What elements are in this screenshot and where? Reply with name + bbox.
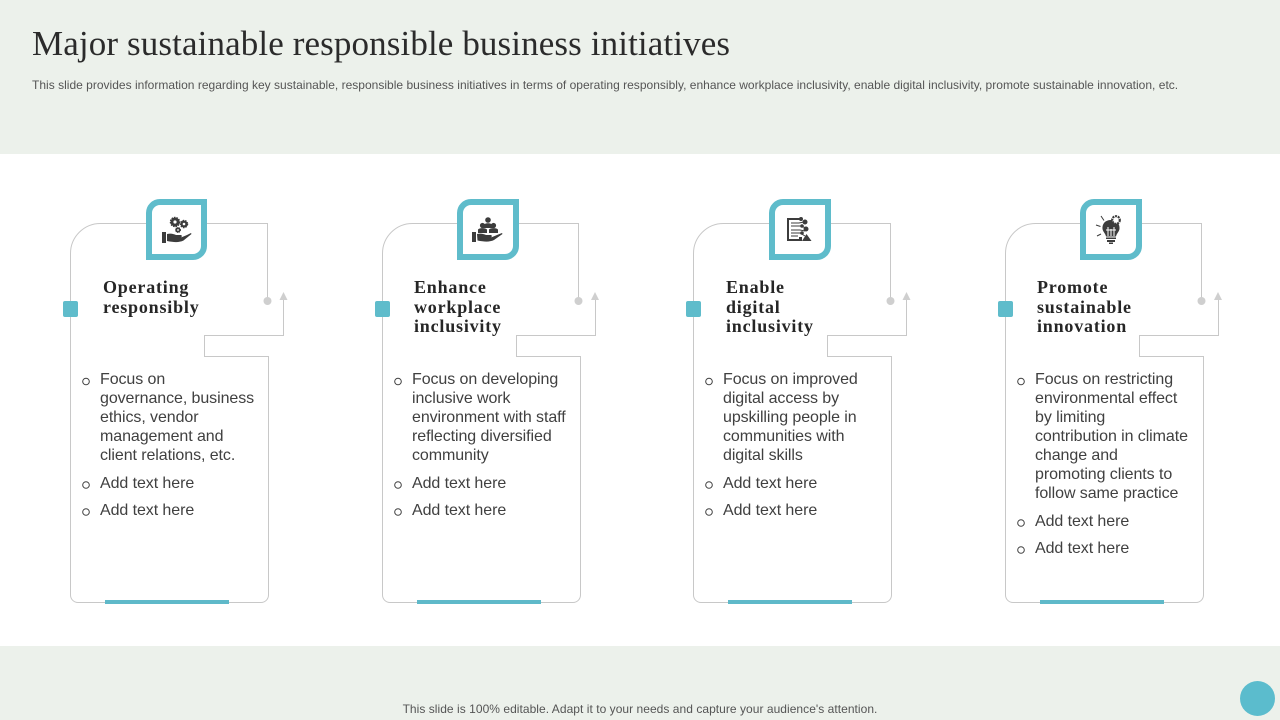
heading bbox=[103, 277, 200, 317]
bullet list bbox=[705, 371, 858, 519]
bullet list: Add text here bbox=[1035, 540, 1129, 557]
heading: Promote bbox=[1037, 277, 1108, 297]
bullet list: Add text here bbox=[723, 502, 817, 519]
subtitle: This slide provides information regarding key sustainable, responsible business initiatives in terms of operating responsibly, enhance workplace inclusivity, enable digital inclusivity, promote sustainable innovation, etc. bbox=[32, 78, 1178, 92]
heading: Enable bbox=[726, 277, 785, 297]
heading: Enhance bbox=[414, 277, 487, 297]
bullet list: Focus on developing bbox=[412, 371, 558, 388]
bullet list: change and bbox=[1035, 447, 1118, 464]
panel: enable digital inclusivity bbox=[686, 199, 910, 604]
bullet list: Add text here bbox=[100, 502, 194, 519]
bullet list: Add text here bbox=[412, 475, 506, 492]
bullet list: ethics, vendor bbox=[100, 409, 198, 426]
bullet list: digital skills bbox=[723, 447, 803, 464]
bullet list: client relations, etc. bbox=[100, 447, 235, 464]
icon: hand with gears bbox=[146, 199, 207, 260]
bullet list: community bbox=[412, 447, 489, 464]
bullet list: Focus on restricting bbox=[1035, 371, 1173, 388]
heading: responsibly bbox=[103, 296, 200, 316]
bullet list: follow same practice bbox=[1035, 485, 1178, 502]
bullet list: Focus on bbox=[100, 371, 165, 388]
heading: inclusivity bbox=[726, 316, 814, 336]
title: Major sustainable responsible business initiatives bbox=[32, 24, 730, 63]
bullet list bbox=[82, 371, 254, 519]
heading bbox=[1037, 277, 1132, 336]
icon: hand holding people bbox=[457, 199, 519, 260]
bullet list: digital access by bbox=[723, 390, 839, 407]
footer band bbox=[0, 646, 1280, 720]
card outline with arrow bbox=[686, 223, 910, 604]
bullet list: environment with staff bbox=[412, 409, 566, 426]
card outline with arrow bbox=[63, 223, 288, 604]
bullet list: Add text here bbox=[1035, 513, 1129, 530]
icon: digital document network bbox=[769, 199, 831, 260]
heading: sustainable bbox=[1037, 296, 1132, 316]
bullet list: reflecting diversified bbox=[412, 428, 552, 445]
bullet list: by limiting bbox=[1035, 409, 1105, 426]
header band bbox=[0, 0, 1280, 154]
icon: light bulb with gear bbox=[1080, 199, 1142, 260]
bullet list: environmental effect bbox=[1035, 390, 1177, 407]
panel: operating responsibly bbox=[63, 199, 288, 604]
heading bbox=[726, 277, 814, 336]
heading bbox=[414, 277, 502, 336]
bullet list bbox=[1017, 371, 1188, 557]
bullet list: communities with bbox=[723, 428, 844, 445]
bullet list: Add text here bbox=[723, 475, 817, 492]
heading: inclusivity bbox=[414, 316, 502, 336]
panel: promote sustainable innovation bbox=[998, 199, 1222, 604]
bullet list: promoting clients to bbox=[1035, 466, 1172, 483]
heading: workplace bbox=[414, 296, 501, 316]
bullet list: Add text here bbox=[100, 475, 194, 492]
panel: enhance workplace inclusivity bbox=[375, 199, 599, 604]
decorative circle button bbox=[1240, 681, 1275, 716]
bullet list: inclusive work bbox=[412, 390, 510, 407]
footer note: This slide is 100% editable. Adapt it to your needs and capture your audience's attention. bbox=[403, 702, 877, 716]
card outline with arrow bbox=[998, 223, 1222, 604]
card outline with arrow bbox=[375, 223, 599, 604]
bullet list bbox=[394, 371, 566, 519]
heading: innovation bbox=[1037, 316, 1127, 336]
heading: Operating bbox=[103, 277, 189, 297]
bullet list: management and bbox=[100, 428, 223, 445]
bullet list: contribution in climate bbox=[1035, 428, 1188, 445]
bullet list: Focus on improved bbox=[723, 371, 858, 388]
bullet list: governance, business bbox=[100, 390, 254, 407]
heading: digital bbox=[726, 296, 781, 316]
bullet list: Add text here bbox=[412, 502, 506, 519]
bullet list: upskilling people in bbox=[723, 409, 857, 426]
